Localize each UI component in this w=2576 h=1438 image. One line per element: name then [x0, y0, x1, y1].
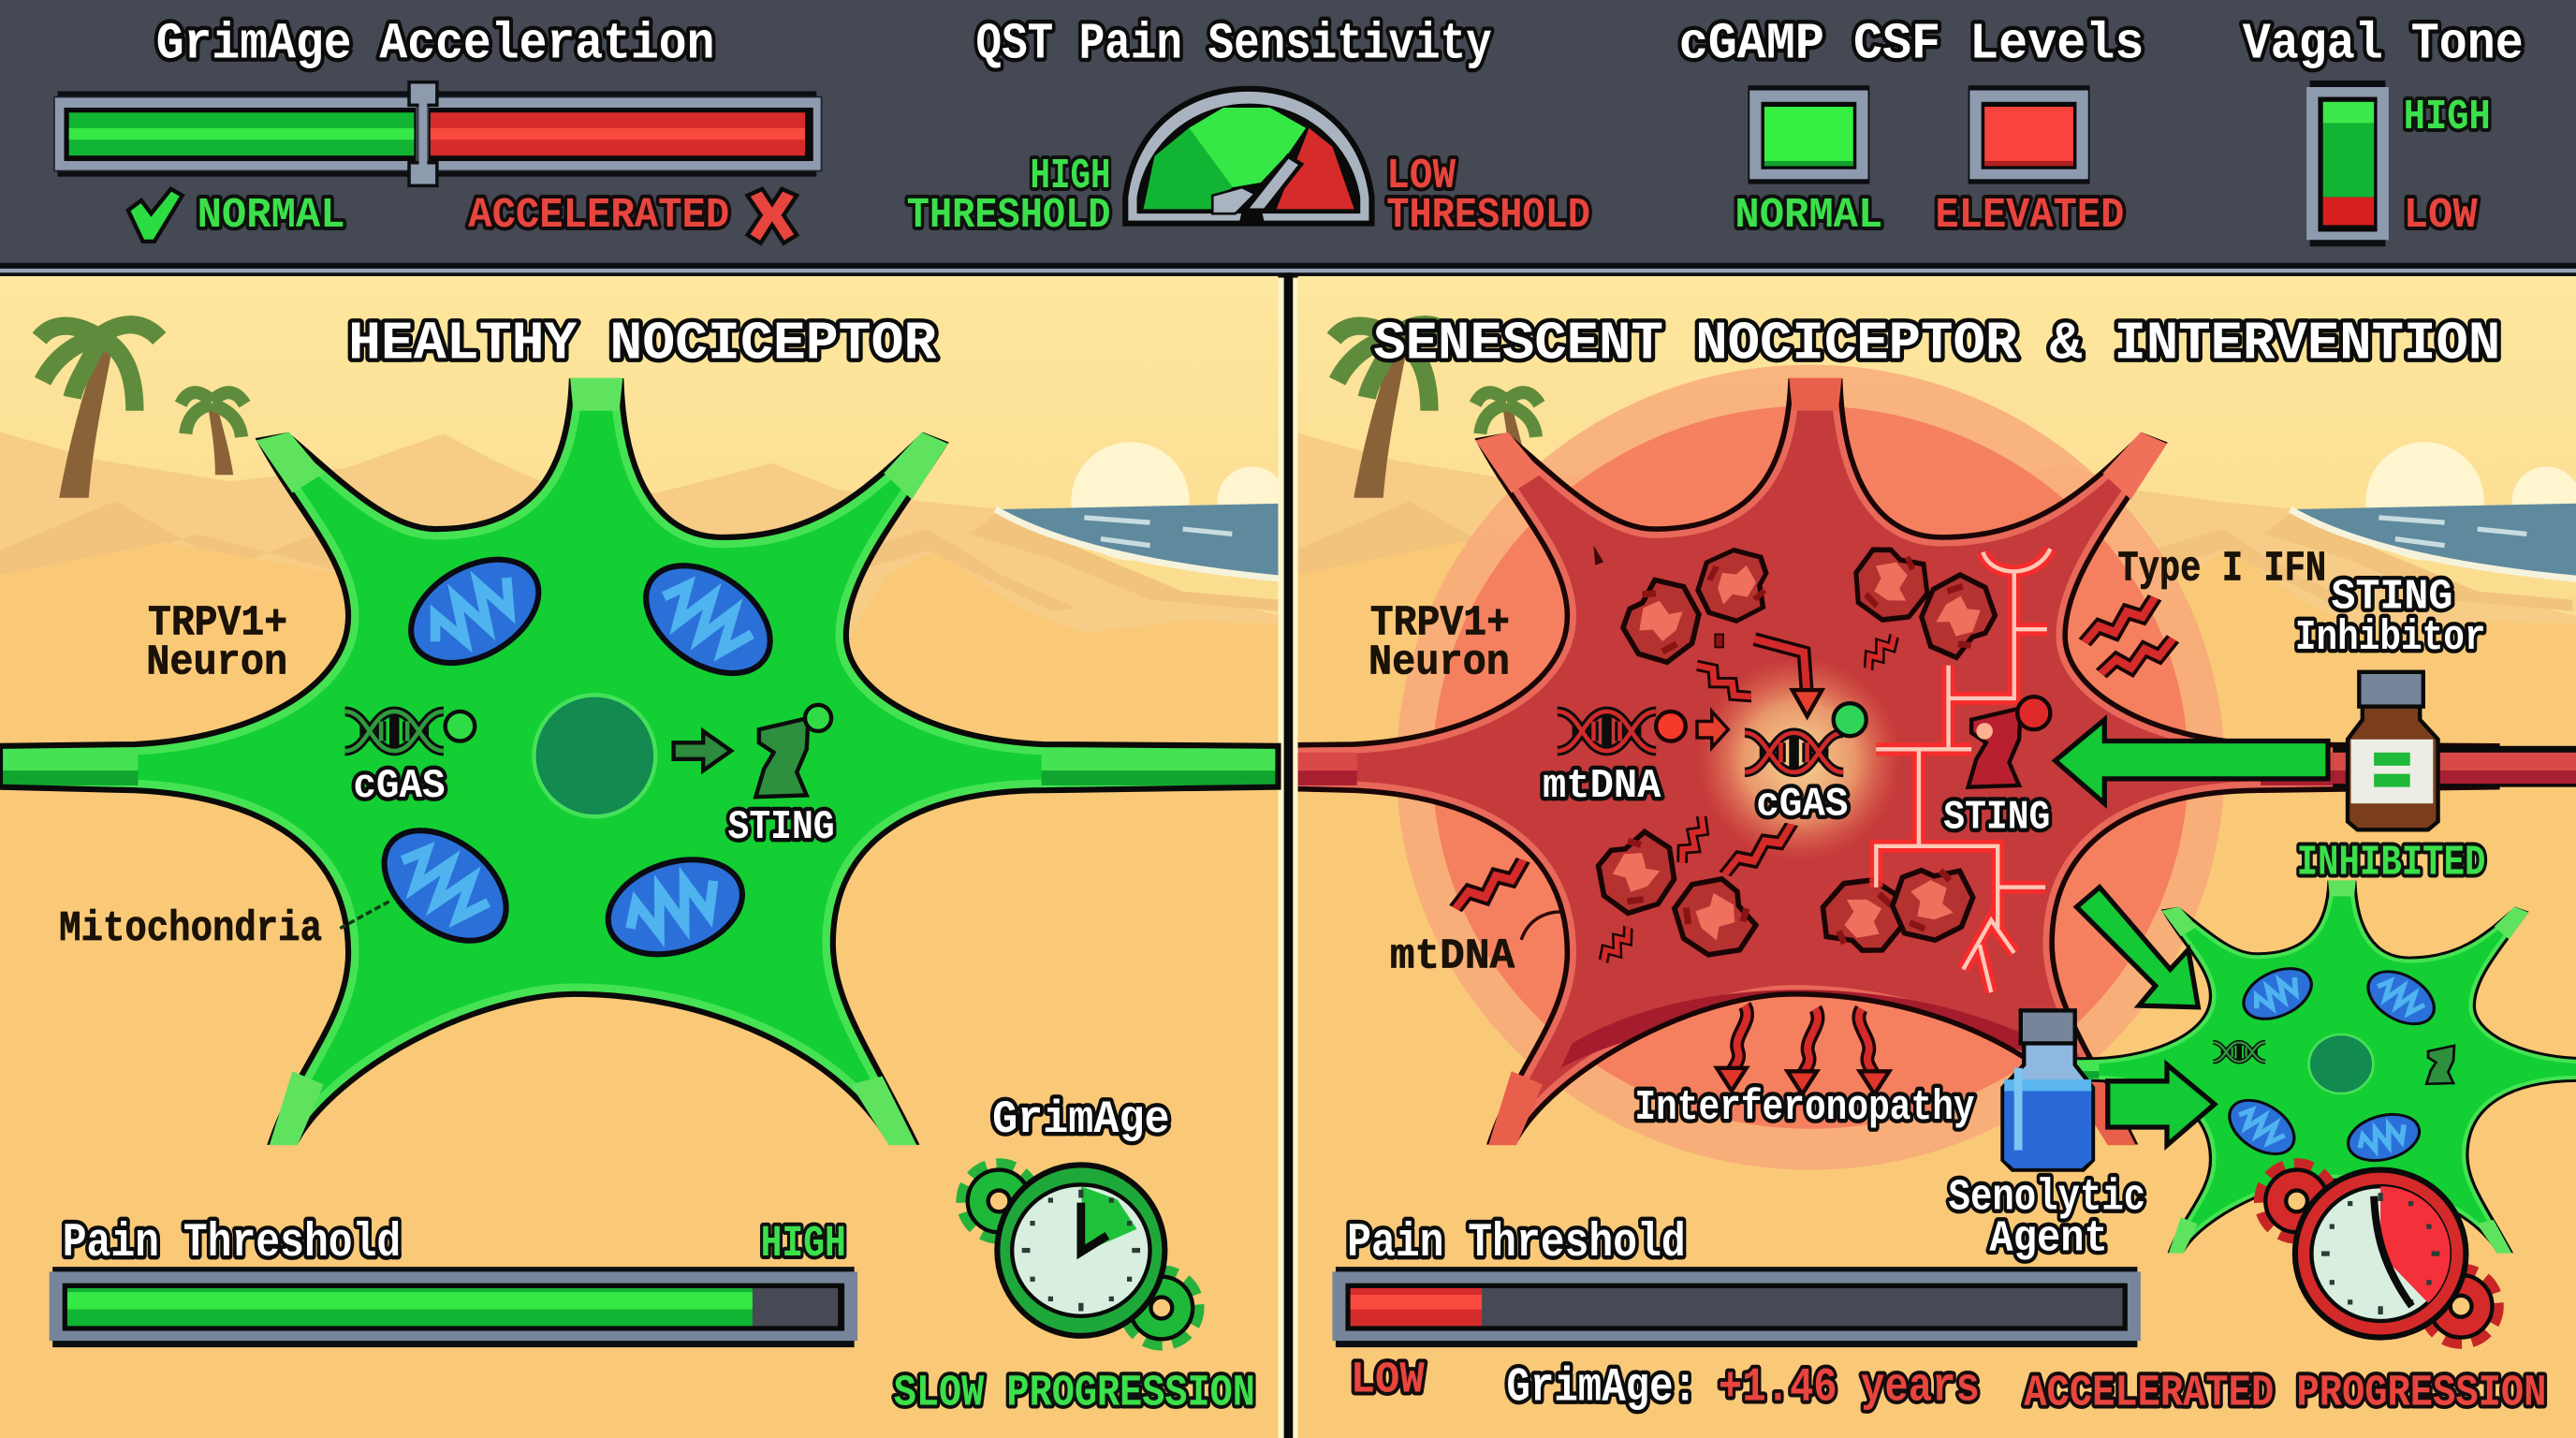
label: Senolytic Agent: [1949, 1174, 2145, 1265]
label: TRPV1+ Neuron: TRPV1+: [148, 598, 287, 647]
desert beach background: [1219, 276, 2576, 1438]
nucleus: [534, 695, 655, 816]
label: high threshold: THRESHOLD: [907, 191, 1110, 240]
icon: STING activated: [1969, 697, 2050, 787]
indicator: normal green: [1748, 85, 1869, 184]
icon: check mark: [128, 189, 183, 242]
label: GrimAge: GrimAge: [992, 1093, 1170, 1146]
label: low threshold: [1386, 152, 1590, 240]
label: Pain Threshold: Pain Threshold: [1347, 1217, 1686, 1270]
label: TRPV1+ Neuron: TRPV1+: [1370, 598, 1510, 647]
panel divider: [1277, 272, 1298, 1438]
label: STING: STING: [728, 804, 835, 851]
mitochondrion top right: [626, 544, 790, 696]
desert beach background: [0, 276, 1314, 1438]
label: STING Inhibitor: Inhibitor: [2295, 613, 2485, 662]
label: normal: NORMAL: [1734, 191, 1882, 240]
label: GrimAge value: +1.46 years: [1719, 1361, 1980, 1415]
label: HIGH: HIGH: [761, 1220, 846, 1269]
label: GrimAge value: GrimAge:: [1506, 1361, 1697, 1415]
neuron: restored small cell: [2026, 880, 2576, 1254]
arrow: cGAS to STING: [674, 731, 731, 770]
pain threshold bar high: [50, 1267, 857, 1347]
panel: healthy nociceptor: [0, 276, 1314, 1438]
label: accelerated: ACCELERATED: [468, 191, 729, 240]
label: TRPV1+ Neuron: Neuron: [1368, 638, 1510, 687]
label: Interferonopathy: Interferonopathy: [1634, 1083, 1975, 1132]
label: Pain Threshold: Pain Threshold: [63, 1217, 401, 1270]
heading: Vagal Tone: Vagal Tone: [2243, 16, 2524, 73]
label: Senolytic Agent: Senolytic: [1949, 1174, 2145, 1224]
label: LOW: LOW: [1351, 1357, 1425, 1406]
metric: GrimAge Acceleration: [54, 16, 822, 243]
neuron: senescent cell body: [1219, 378, 2500, 1145]
icon: STING inhibitor bottle: [2348, 672, 2438, 829]
label: TRPV1+ Neuron: Neuron: [146, 638, 287, 687]
heading: Senescent Nociceptor and Intervention: SENESCENT NOCICEPTOR & INTERVENTION: [1373, 315, 2500, 375]
label: high threshold: HIGH: [1030, 152, 1110, 200]
label: TRPV1+ Neuron: [146, 598, 287, 687]
label: cGAS: cGAS: [353, 763, 446, 810]
label: mtDNA: mtDNA: [1543, 763, 1661, 810]
heading: QST Pain Sensitivity: QST Pain Sensitivity: [976, 16, 1492, 73]
arrow: mtDNA to cGAS: [1754, 639, 1822, 716]
heading: Healthy Nociceptor: HEALTHY NOCICEPTOR: [348, 315, 937, 375]
gauge: [1125, 89, 1372, 225]
metric: Vagal Tone: [2243, 16, 2524, 246]
arrow: senolytic to restored cell: [2108, 1064, 2215, 1145]
signalling pathways: [1876, 549, 2050, 992]
arrow: diagonal to restored cell: [2076, 888, 2198, 1007]
label: mtDNA outside: [1390, 912, 1560, 981]
label: normal: NORMAL: [198, 191, 345, 240]
status bar background: [0, 0, 2576, 278]
heading: cGAMP CSF Levels: cGAMP CSF Levels: [1679, 16, 2144, 73]
label: high: HIGH: [2404, 93, 2491, 141]
acceleration slider bar: [54, 82, 822, 185]
metric: QST Pain Sensitivity: [907, 16, 1590, 240]
label: high threshold: [907, 152, 1110, 240]
neuron: healthy cell body: [0, 378, 1281, 1145]
released mtDNA fragments: [1452, 597, 2177, 964]
icon: cross mark: [748, 189, 797, 243]
icon: mtDNA: [1558, 712, 1728, 751]
label: low threshold: THRESHOLD: [1386, 191, 1590, 240]
label: slow progression: SLOW PROGRESSION: [894, 1370, 1255, 1419]
label: mtDNA outside: mtDNA: [1390, 932, 1515, 981]
panel: senescent nociceptor and intervention: [1219, 276, 2576, 1438]
inflammation halo: [1397, 365, 2224, 1170]
label: cGAS: cGAS: [1756, 781, 1848, 828]
pain threshold bar low: [1332, 1267, 2141, 1347]
small dark blemish: [1593, 546, 1603, 565]
icon: GrimAge clock accelerated: [2261, 1165, 2497, 1343]
label: Senolytic Agent: Agent: [1989, 1215, 2108, 1265]
icon: GrimAge clock slow: [962, 1165, 1197, 1344]
mitochondrion bottom right: [596, 844, 754, 971]
label: low threshold: LOW: [1386, 152, 1456, 200]
label: Mitochondria: Mitochondria: [59, 904, 322, 953]
arrow: inhibitor blocks STING: [2056, 720, 2328, 803]
icon: STING: [755, 705, 831, 797]
label: STING Inhibitor: STING: [2331, 572, 2452, 621]
indicator: elevated red: [1969, 85, 2089, 184]
icon: cGAS DNA: [1745, 703, 1866, 772]
cGAS activation glow: [1697, 657, 1901, 861]
label: low: LOW: [2404, 191, 2478, 240]
heading: GrimAge Acceleration: GrimAge Acceleration: [156, 16, 714, 73]
label: INHIBITED: INHIBITED: [2297, 839, 2485, 888]
vertical tone meter: [2306, 81, 2389, 246]
damaged mitochondria: [1586, 537, 2004, 968]
icon: senolytic vial: [2002, 1010, 2093, 1170]
label: Type I IFN: Type I IFN: [2117, 545, 2326, 594]
label: elevated: ELEVATED: [1936, 191, 2124, 240]
label: STING Inhibitor: [2295, 572, 2485, 662]
metric: cGAMP CSF Levels: [1679, 16, 2144, 240]
axon right extension: [2333, 746, 2576, 787]
mitochondrion top left: [393, 538, 557, 684]
label: STING: STING: [1943, 795, 2050, 842]
icon: cGAS DNA: [345, 712, 475, 751]
interferon arrows: [1717, 1005, 1889, 1094]
label: GrimAge value: [1506, 1361, 1980, 1415]
mitochondrion bottom left: [363, 808, 527, 963]
label: TRPV1+ Neuron: [1368, 598, 1510, 687]
